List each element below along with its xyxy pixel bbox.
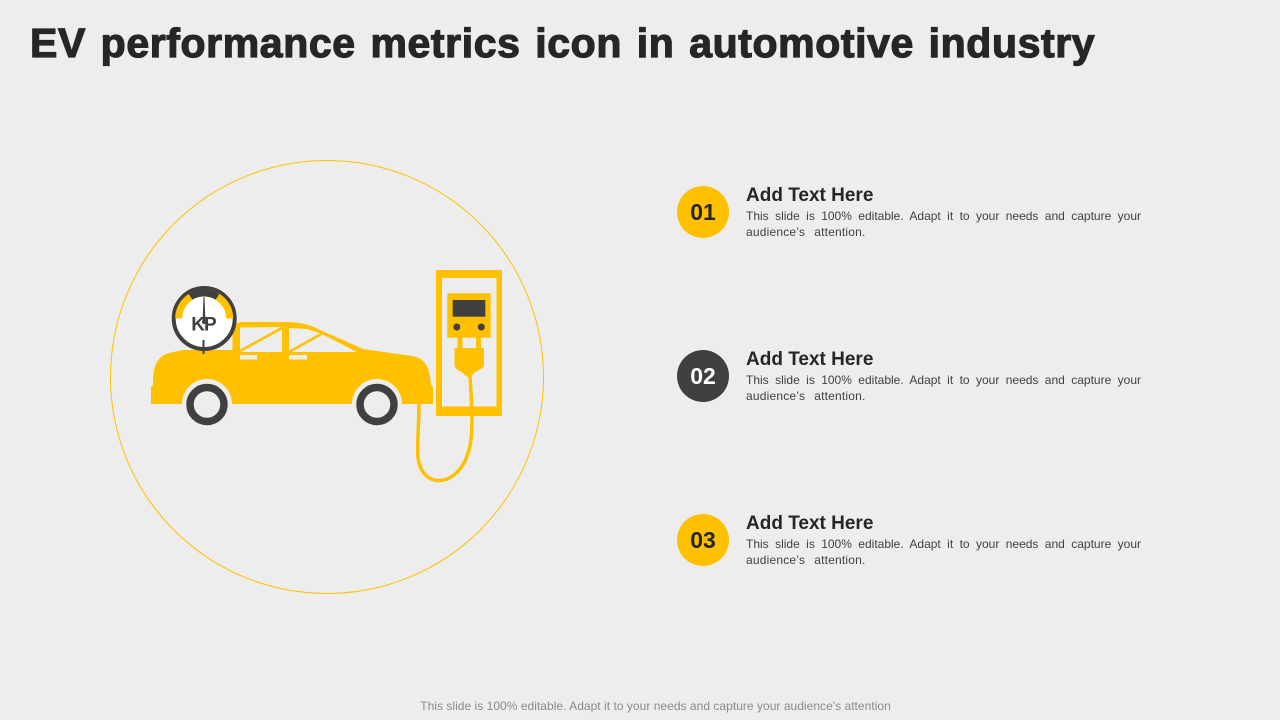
list item 01 <box>677 185 1141 239</box>
gauge label: KP <box>191 314 217 336</box>
badge 01 <box>677 186 729 238</box>
gauge arc <box>179 293 230 318</box>
text 02: audience’s attention. <box>746 389 866 403</box>
text 03: This slide is 100% editable. Adapt it to your needs and capture your <box>746 537 1141 551</box>
icon: KPI gauge <box>174 288 235 354</box>
text 02 <box>746 373 1141 403</box>
heading 02: Add Text Here <box>746 349 873 370</box>
icon: charging cable <box>418 376 472 481</box>
badge 03: 03 <box>690 527 716 553</box>
footer note: This slide is 100% editable. Adapt it to your needs and capture your audience's attention <box>420 699 891 713</box>
badge 02: 02 <box>690 363 716 389</box>
outline circle <box>110 160 544 594</box>
list item 02 <box>677 349 1141 403</box>
text 01: audience’s attention. <box>746 225 866 239</box>
car wheels <box>190 388 394 422</box>
text 03 <box>746 537 1141 567</box>
icon: car <box>151 322 433 422</box>
heading 01: Add Text Here <box>746 185 873 206</box>
heading 03: Add Text Here <box>746 513 873 534</box>
gauge needle <box>202 297 206 322</box>
illustration: EV charging in circle <box>110 160 544 594</box>
car wheel arches <box>182 379 402 404</box>
list item 03 <box>677 513 1141 567</box>
car windows <box>240 327 357 360</box>
text 01 <box>746 209 1141 239</box>
plug <box>454 337 484 377</box>
badge 01: 01 <box>690 199 716 225</box>
car window struts <box>240 328 323 352</box>
station display unit <box>447 293 491 338</box>
title: EV performance metrics icon in automotive industry <box>30 20 1095 66</box>
badge 02 <box>677 350 729 402</box>
text 01: This slide is 100% editable. Adapt it to your needs and capture your <box>746 209 1141 223</box>
text 02: This slide is 100% editable. Adapt it to your needs and capture your <box>746 373 1141 387</box>
text 03: audience’s attention. <box>746 553 866 567</box>
badge 03 <box>677 514 729 566</box>
icon: charging station <box>436 270 502 416</box>
